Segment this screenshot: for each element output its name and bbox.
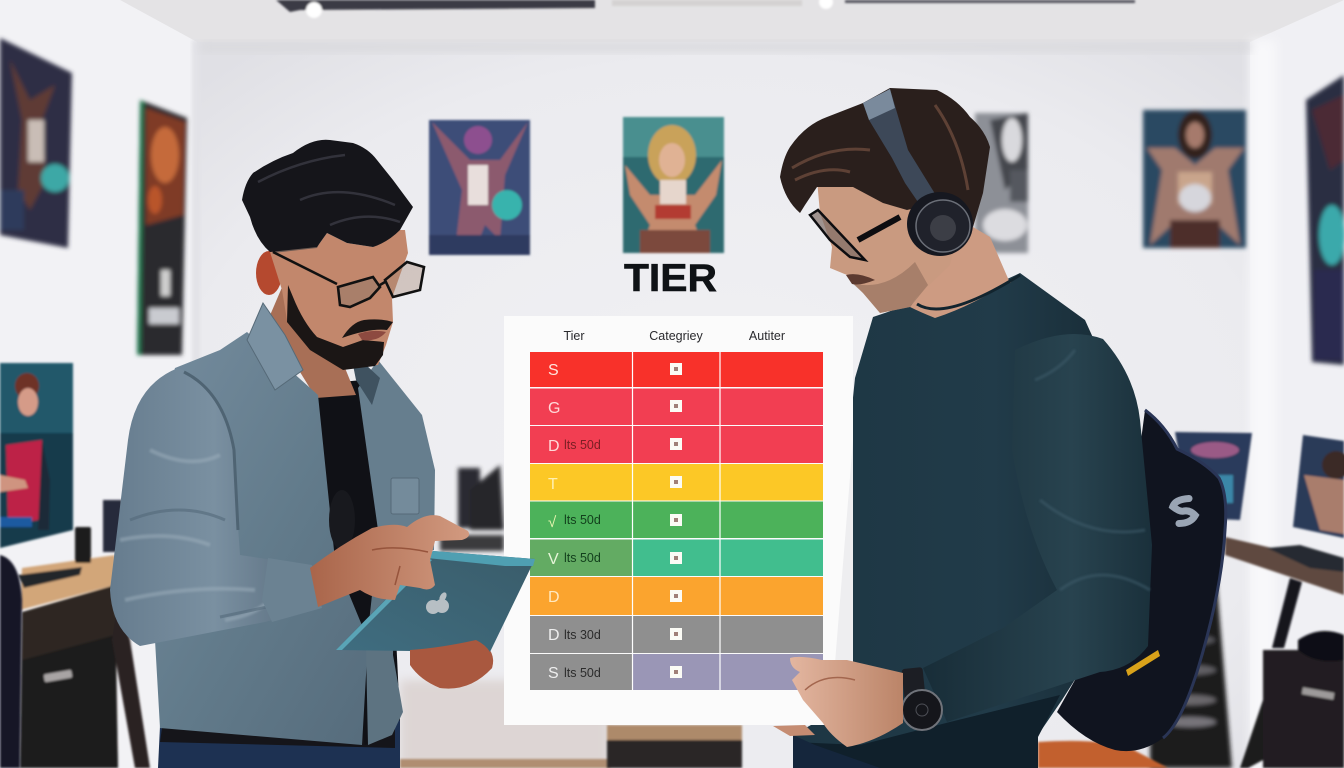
row: check lts 50d	[530, 502, 823, 538]
head	[780, 88, 990, 313]
right hand	[790, 657, 903, 747]
mouth	[846, 274, 875, 284]
row: T	[530, 464, 823, 500]
dark objects behind left man	[440, 465, 504, 551]
row: S	[530, 352, 823, 387]
headphone band	[863, 89, 937, 205]
hair fade	[262, 228, 327, 253]
desk: right	[1225, 537, 1344, 768]
tablet	[336, 551, 535, 652]
row: V lts 50d	[530, 540, 823, 576]
desk: left	[18, 500, 150, 768]
shirt pocket	[391, 478, 419, 514]
row: S: S	[548, 362, 559, 379]
stubble	[852, 262, 928, 313]
mouth	[358, 331, 386, 340]
lower body shadow	[793, 695, 1060, 768]
row: D lts 50d: D	[548, 438, 560, 455]
shirt torso	[135, 332, 368, 745]
title: TIER: TIER	[624, 257, 717, 300]
row: check lts 50d: √	[548, 514, 557, 531]
headphone ear cup	[907, 192, 973, 256]
sunglasses clipped to shirt	[329, 490, 355, 550]
left sleeve	[110, 368, 318, 646]
watch	[901, 667, 942, 730]
row: D lts 30d	[530, 616, 823, 653]
row: V lts 50d: V	[548, 551, 559, 568]
poster: far right	[1306, 75, 1344, 365]
table column headers: Tier	[563, 329, 585, 343]
poster: green edge	[137, 100, 187, 355]
glasses	[810, 210, 900, 260]
row: D lts 50d	[530, 426, 823, 463]
person: left man	[110, 140, 535, 768]
row: D lts 30d: D	[548, 627, 560, 644]
head	[242, 140, 424, 370]
poster: teal figure right	[1143, 110, 1246, 248]
row: D lts 50d: lts 50d	[564, 438, 601, 452]
hair	[242, 140, 413, 252]
backpack logo	[1172, 497, 1196, 525]
sweater body	[793, 273, 1130, 768]
jeans	[793, 735, 880, 768]
pointing hand	[310, 515, 469, 607]
row: S lts 50d: S	[548, 665, 559, 682]
shirt right panel	[358, 360, 435, 560]
row: S lts 50d	[530, 654, 823, 690]
face	[270, 230, 408, 368]
face	[817, 180, 965, 313]
table column headers: Categriey	[649, 329, 703, 343]
shirt cuff	[262, 558, 322, 622]
row: D lts 30d: lts 30d	[564, 628, 601, 642]
person: right man arm and head	[773, 88, 1152, 747]
row: T: T	[548, 476, 558, 493]
black tee	[310, 380, 400, 745]
row: G	[530, 388, 823, 425]
neck	[910, 227, 1020, 318]
shelf: blurred behind chair	[1150, 560, 1232, 768]
orange seat: bottom	[1038, 741, 1168, 768]
poster: far left	[0, 38, 72, 248]
jeans and belt	[158, 720, 400, 768]
row: S lts 50d: lts 50d	[564, 666, 601, 680]
ear	[256, 251, 282, 295]
person: right man torso	[793, 227, 1130, 768]
poster: blonde figure	[623, 117, 724, 253]
row: D orange: D	[548, 589, 560, 606]
poster: behind right man	[975, 113, 1028, 253]
paper: tier table	[504, 316, 853, 725]
apple logo	[426, 591, 449, 614]
monitor: right small	[1175, 432, 1252, 520]
category icons	[670, 363, 682, 678]
monitor: left with game character	[0, 363, 73, 548]
ceiling lights	[276, 0, 1135, 18]
glasses	[273, 252, 424, 307]
hair	[780, 88, 990, 227]
row: G: G	[548, 400, 560, 417]
column separators	[632, 352, 720, 690]
row: V lts 50d: lts 50d	[564, 551, 601, 565]
table column headers: Autiter	[749, 329, 785, 343]
lower fingers	[410, 640, 493, 689]
sweater arm	[923, 334, 1152, 722]
chair: left edge	[0, 555, 22, 768]
poster: purple figure	[429, 120, 530, 255]
lower hand	[410, 640, 493, 688]
table column headers	[563, 329, 785, 343]
backpack on right man	[1057, 410, 1226, 751]
row: check lts 50d: lts 50d	[564, 513, 601, 527]
paper sheet	[504, 316, 853, 725]
drawer unit: bottom centre	[607, 725, 742, 768]
mustache	[342, 319, 393, 338]
monitor: right	[1293, 435, 1344, 538]
row: D orange	[530, 577, 823, 615]
neck	[268, 285, 356, 398]
beard	[287, 285, 384, 370]
backpack yellow strip	[1126, 650, 1160, 676]
collar	[247, 303, 303, 390]
